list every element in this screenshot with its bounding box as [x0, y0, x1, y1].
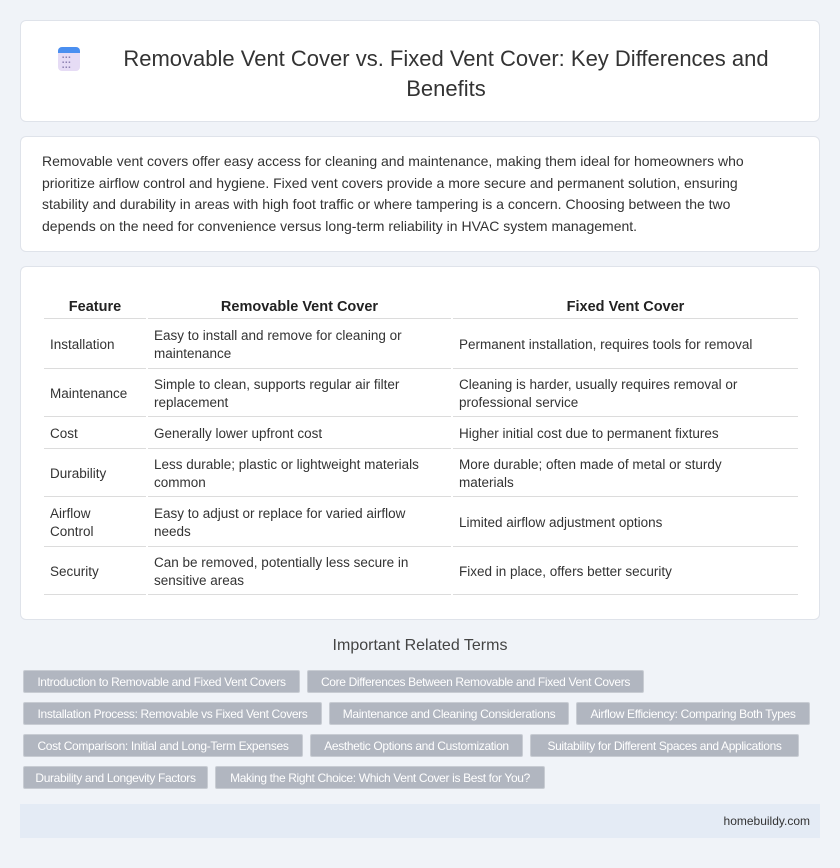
icon: calendar: ▪▪▪: [62, 60, 71, 66]
table: Higher initial cost due to permanent fixtures: [459, 426, 719, 440]
header panel: [20, 20, 820, 122]
table: Airflow Control: [50, 506, 94, 538]
comparison table panel: [20, 266, 820, 620]
table: Removable Vent Cover: [221, 298, 378, 314]
related terms heading: Important Related Terms: [333, 637, 507, 654]
related terms tags: Suitability for Different Spaces and Applications: [547, 738, 782, 752]
table: Less durable; plastic or lightweight materials common: [154, 456, 419, 490]
footer: [20, 804, 820, 838]
related terms tags: Cost Comparison: Initial and Long-Term Expenses: [37, 738, 288, 752]
table: Easy to install and remove for cleaning or maintenance: [154, 328, 402, 360]
related terms tags: Aesthetic Options and Customization: [324, 738, 509, 752]
related terms tags: Maintenance and Cleaning Considerations: [343, 706, 555, 720]
table: Easy to adjust or replace for varied airflow needs: [154, 506, 405, 538]
footer: homebuildy.com: [724, 814, 810, 828]
title: Removable Vent Cover vs. Fixed Vent Cover: Key Differences and Benefits: [123, 46, 769, 101]
related terms tags: Introduction to Removable and Fixed Vent Covers: [37, 674, 286, 688]
table: Cost: [50, 426, 78, 440]
table: Can be removed, potentially less secure in sensitive areas: [154, 554, 408, 588]
intro text panel: Removable vent covers offer easy access for cleaning and maintenance, making them ideal for homeowners who prioritize airflow control and hygiene. Fixed vent covers provide a more secure and permanent solution, ensuring stability and durability in areas with high foot traffic or where tampering is a concern. Choosing between the two depends on the need for convenience versus long-term reliability in HVAC system management.: [42, 153, 744, 234]
related terms tags: [23, 670, 810, 789]
related terms tags: Durability and Longevity Factors: [35, 770, 196, 784]
intro text panel: [20, 136, 820, 252]
icon: calendar: [58, 47, 80, 71]
table: Security: [50, 564, 99, 578]
table: Fixed Vent Cover: [567, 298, 684, 314]
table: Simple to clean, supports regular air filter replacement: [154, 376, 399, 410]
related terms tags: Airflow Efficiency: Comparing Both Types: [590, 706, 796, 720]
table: Fixed in place, offers better security: [459, 564, 672, 578]
table: Feature: [69, 298, 121, 314]
table: More durable; often made of metal or sturdy materials: [459, 456, 722, 490]
table: Durability: [50, 466, 106, 480]
table: Permanent installation, requires tools for removal: [459, 336, 752, 352]
icon: calendar: ▪▪▪: [62, 55, 71, 61]
table: Installation: [50, 336, 115, 352]
table: Cleaning is harder, usually requires removal or professional service: [459, 376, 737, 410]
icon: calendar: ▪▪▪: [62, 65, 71, 71]
related terms tags: Making the Right Choice: Which Vent Cover is Best for You?: [230, 770, 530, 784]
table: Generally lower upfront cost: [154, 426, 322, 440]
table: [44, 298, 798, 595]
table: Limited airflow adjustment options: [459, 514, 662, 530]
related terms tags: Installation Process: Removable vs Fixed Vent Covers: [38, 706, 307, 720]
related terms tags: Core Differences Between Removable and Fixed Vent Covers: [321, 674, 630, 688]
table: Maintenance: [50, 386, 127, 400]
